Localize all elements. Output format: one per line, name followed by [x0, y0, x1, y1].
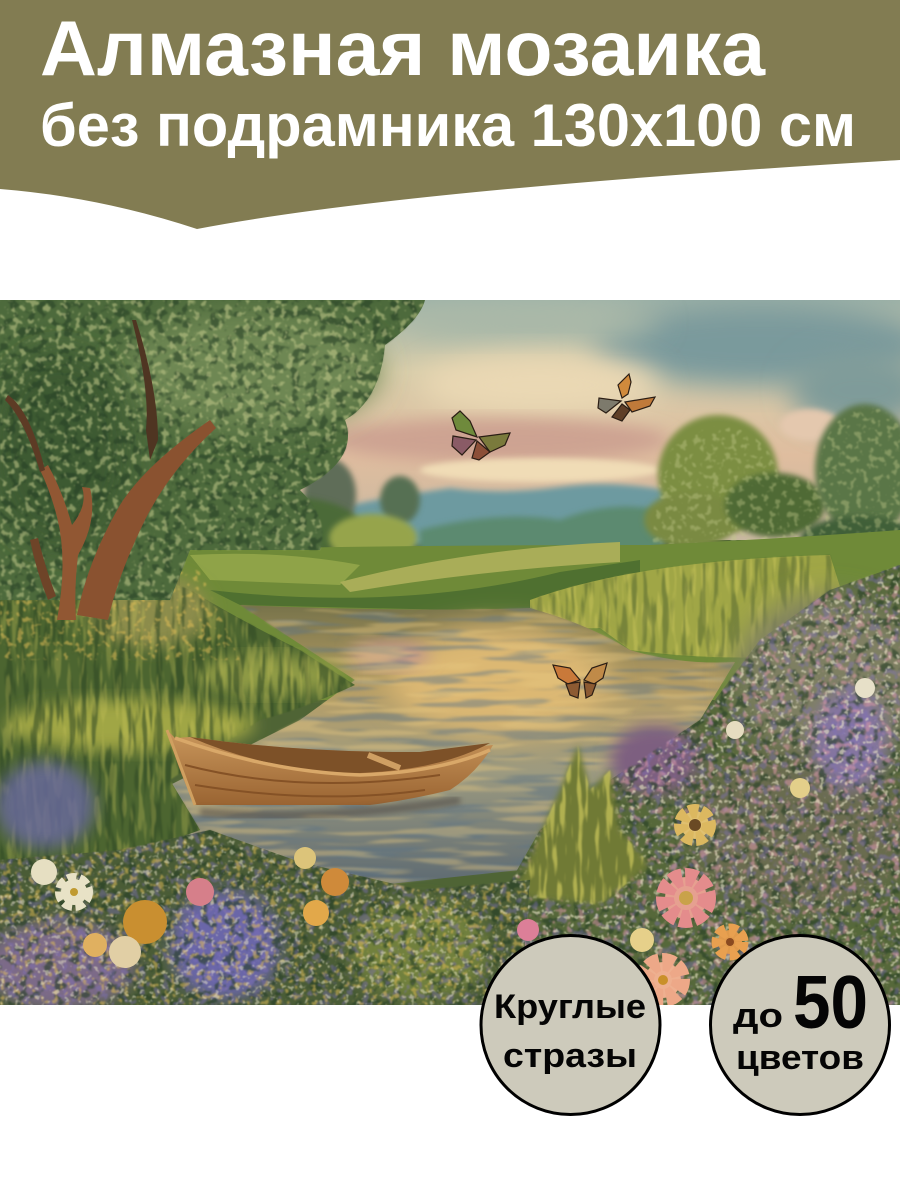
flower blossoms: [31, 678, 875, 998]
badge: up to 50 colours: до: [733, 997, 783, 1035]
tree trunk and branches: [77, 420, 216, 620]
foreground flowers left: [0, 830, 530, 1010]
distant mountains: [350, 484, 665, 545]
badge: round rhinestones: Круглые: [494, 988, 646, 1026]
butterfly top right: [598, 374, 655, 421]
subtitle: без подрамника 130х100 см: [40, 92, 856, 159]
large tree: [0, 300, 425, 620]
meadow: [180, 530, 900, 700]
badge: up to 50 colours: [710, 936, 890, 1114]
lake: [160, 605, 735, 885]
rowing boat: [167, 730, 493, 815]
painting: landscape with lake and boat: [0, 300, 900, 1010]
sky: [250, 300, 900, 540]
badge: up to 50 colours: цветов: [736, 1039, 864, 1077]
badge: round rhinestones: стразы: [503, 1037, 637, 1075]
header banner: [0, 0, 900, 229]
badge: up to 50 colours: 50: [793, 960, 868, 1044]
title: Алмазная мозаика: [40, 4, 766, 92]
butterfly middle: [452, 411, 510, 460]
right flower bank: [510, 565, 900, 1005]
badge: round rhinestones: [481, 936, 660, 1114]
far trees: [180, 404, 900, 564]
left bank: [0, 560, 355, 860]
butterfly lake: [553, 663, 607, 698]
reeds: [515, 745, 650, 905]
